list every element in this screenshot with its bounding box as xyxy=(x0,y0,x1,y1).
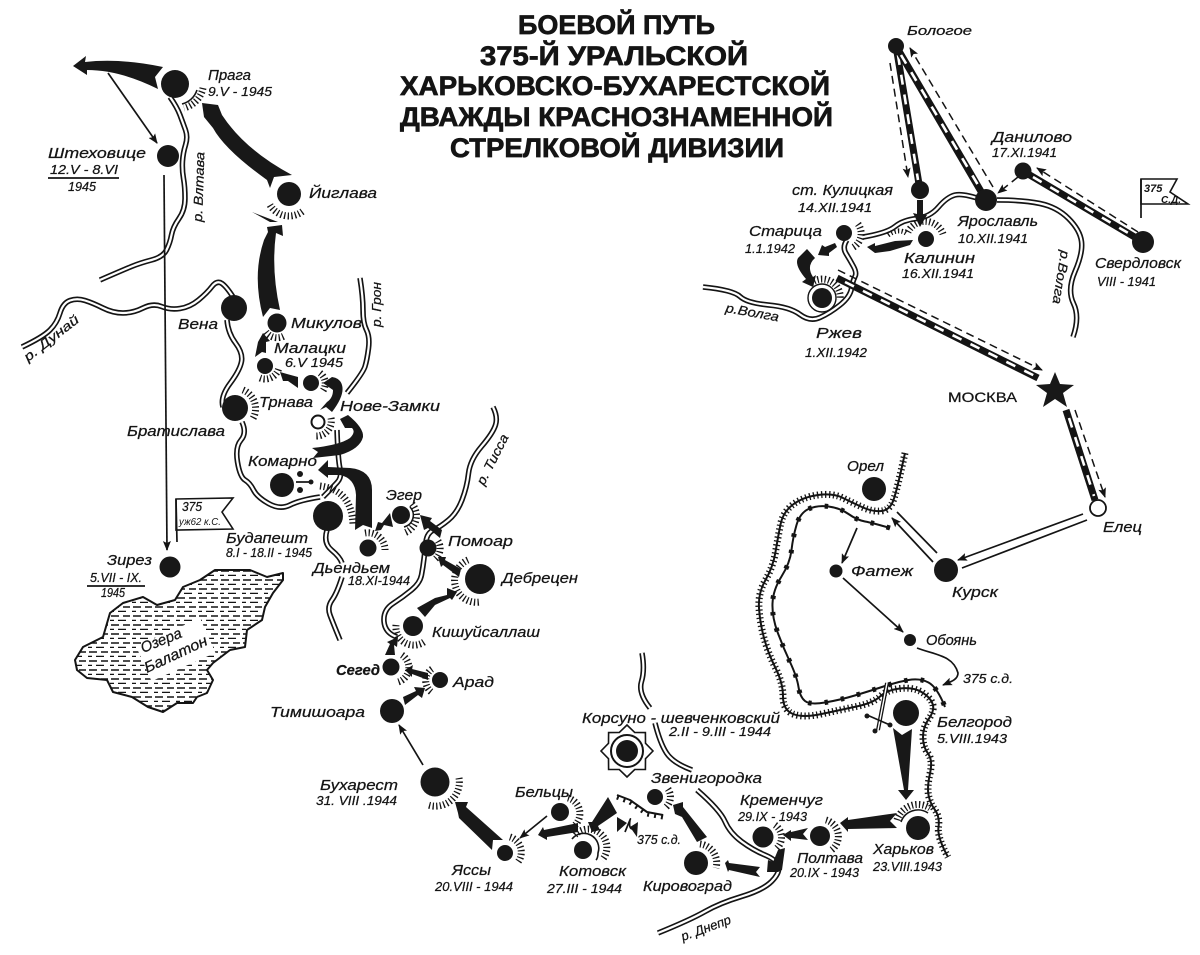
city: Shtekhovitse: 12.V - 8.VI xyxy=(50,162,118,177)
railway routes xyxy=(837,46,1143,500)
front line near Zvenigorodka with 375th division symbol xyxy=(617,795,681,847)
arrow: Pomoar to Eger xyxy=(420,515,442,538)
city: Timisoara xyxy=(270,699,404,723)
city: Sverdlovsk xyxy=(1095,231,1182,289)
city: Rzhev xyxy=(805,279,868,360)
city: Shtekhovitse: 1945 xyxy=(68,179,97,194)
arrow: Kulitskaya to Kalinin xyxy=(913,200,927,227)
city: Zvenigorodka xyxy=(647,770,762,808)
city: Poltava: 20.IX - 1943 xyxy=(789,865,860,880)
arrow: Kotovsk to Beltsy xyxy=(538,823,578,840)
city: Iasi: Яссы xyxy=(451,862,491,879)
city: Zvenigorodka: Звенигородка xyxy=(651,770,762,787)
city: Debrecen: Дебрецен xyxy=(500,570,578,587)
city: Bucharest: 31. VIII .1944 xyxy=(316,793,397,808)
title xyxy=(400,9,833,163)
river labels: р.Волга xyxy=(1050,248,1073,305)
arrow: Oboyan to Belgorod front xyxy=(917,648,958,685)
city: Malacky: Малацки xyxy=(274,340,347,357)
city: Kremenchug xyxy=(737,792,824,849)
city: Gyongyos xyxy=(311,533,410,588)
city: Eger xyxy=(386,487,422,533)
city: Szeged: Сегед xyxy=(336,662,380,679)
river labels: р.Волга xyxy=(723,300,780,324)
encirclement: Korsun-Shevchenkovsky: 2.II - 9.III - 1944 xyxy=(668,724,771,739)
city: Bratislava and Trnava xyxy=(127,390,313,440)
encirclement: Korsun-Shevchenkovsky: Корсуно - шевченковский xyxy=(582,710,781,727)
city: Shtekhovitse: Штеховице xyxy=(48,145,146,162)
station: Kulitskaya: ст. Кулицкая xyxy=(792,182,893,199)
arrow: Kharkov to Poltava xyxy=(840,813,897,832)
city: Kursk: Курск xyxy=(952,584,999,601)
city: Bologoe xyxy=(888,23,972,54)
city: Vienna: Вена xyxy=(178,316,218,333)
title: 375-Й УРАЛЬСКОЙ xyxy=(480,40,748,71)
city: Budapest: 8.I - 18.II - 1945 xyxy=(226,545,313,560)
arrow: Jihlava to Prague xyxy=(202,103,292,188)
city: Elets xyxy=(1090,500,1142,536)
arrow: Prague to Shtekhovitse xyxy=(108,73,157,143)
city: Shtekhovitse xyxy=(48,145,179,194)
city: Prague: 9.V - 1945 xyxy=(208,84,273,99)
city: Sverdlovsk: VIII - 1941 xyxy=(1097,274,1156,289)
title: ДВАЖДЫ КРАСНОЗНАМЕННОЙ xyxy=(400,101,833,132)
front line: Kursk bulge xyxy=(759,453,948,857)
division label: 375 s.d. near Belgorod: 375 с.д. xyxy=(963,671,1013,686)
arrow: Poltava to Kremenchug xyxy=(783,828,808,841)
river labels: р. Грон xyxy=(369,282,384,328)
city: Pomoar xyxy=(420,533,513,560)
city: Staritsa: 1.1.1942 xyxy=(745,241,796,256)
city: Yaroslavl: Ярославль xyxy=(957,213,1038,230)
city: Budapest xyxy=(226,486,353,560)
city: Pomoar: Помоар xyxy=(448,533,513,550)
city: Kalinin: 16.XII.1941 xyxy=(902,266,974,281)
city: Malacky: 6.V 1945 xyxy=(285,355,344,370)
city: Belgorod with crossed swords: Белгород xyxy=(937,714,1012,731)
city: Bratislava and Trnava: Трнава xyxy=(259,394,313,411)
arrow: Beltsy to Iasi xyxy=(520,816,547,838)
arrow: Nove Zamky curved xyxy=(320,377,343,412)
arrow: Szeged to Kishuysallash xyxy=(385,637,398,655)
river labels: р. Дунай xyxy=(20,312,82,365)
river labels: р. Днепр xyxy=(678,912,733,944)
city: Kalinin: Калинин xyxy=(904,250,975,267)
city: Arad xyxy=(426,669,494,693)
arrow: Shtekhovitse to Zirez xyxy=(164,175,167,550)
arrow: Rzhev curved xyxy=(797,249,816,287)
city: Iasi xyxy=(434,837,521,894)
encirclement: Korsun-Shevchenkovsky xyxy=(582,710,781,777)
title: ХАРЬКОВСКО-БУХАРЕСТСКОЙ xyxy=(400,70,830,101)
city: Kremenchug: 29.IX - 1943 xyxy=(737,809,808,824)
rivers xyxy=(22,97,1082,933)
city: Danilovo: Данилово xyxy=(990,129,1072,146)
arrow: Gyongyos to Komarno xyxy=(318,460,372,530)
city: Malacky xyxy=(257,340,347,379)
city: Bratislava and Trnava: Братислава xyxy=(127,423,225,440)
city: Oboyan xyxy=(904,632,977,649)
city: Bucharest: Бухарест xyxy=(320,777,398,794)
arrow: Mikulov to Jihlava xyxy=(252,212,283,317)
city: Orel: Орел xyxy=(847,458,885,475)
city: Beltsy xyxy=(515,784,580,825)
city: Zirez xyxy=(87,552,180,600)
flag: 375 near Sverdlovsk: С.Д. xyxy=(1161,195,1181,206)
city: Budapest: Будапешт xyxy=(226,530,308,547)
flag: 375 near Zirez xyxy=(176,498,233,542)
city: Mikulov xyxy=(266,314,362,338)
arrow: Staritsa to Rzhev xyxy=(818,243,837,256)
title: СТРЕЛКОВОЙ ДИВИЗИИ xyxy=(450,132,784,163)
flag: 375 near Zirez: уж62 к.С. xyxy=(178,517,221,528)
city: Poltava xyxy=(789,820,863,880)
city: Arad: Арад xyxy=(452,674,494,691)
city: Prague: Прага xyxy=(208,67,251,84)
city: Yaroslavl: 10.XII.1941 xyxy=(958,231,1028,246)
city: Bucharest xyxy=(316,768,459,808)
settlement between Malacky and Trnava xyxy=(303,373,325,392)
station: Kulitskaya: 14.XII.1941 xyxy=(798,200,872,215)
arrow: Elets to Kursk xyxy=(958,514,1087,568)
city: Kirovograd xyxy=(643,844,732,895)
flag: 375 near Sverdlovsk xyxy=(1141,179,1188,218)
arrow: Dnieper to Kirovograd xyxy=(725,860,760,877)
city: Nove Zamky xyxy=(312,398,441,436)
city: Kalinin xyxy=(888,221,975,281)
city: Belgorod with crossed swords: 5.VIII.1943 xyxy=(937,731,1008,746)
city: Kishuysallash: Кишуйсаллаш xyxy=(432,624,541,641)
arrow: Arad to Szeged xyxy=(405,665,428,680)
city: Fatezh xyxy=(830,563,914,580)
city: Iasi: 20.VIII - 1944 xyxy=(434,879,513,894)
city: Timisoara: Тимишоара xyxy=(270,704,365,721)
city: Gyongyos: Дьендьем xyxy=(311,560,390,577)
arrow: 375 to Kotovsk xyxy=(588,797,617,832)
city: Szeged xyxy=(336,655,409,682)
city: Rzhev: 1.XII.1942 xyxy=(805,345,868,360)
arrow: Eger to Gyongyos xyxy=(375,513,393,531)
city: Zirez: 5.VII - IX. xyxy=(90,570,142,585)
city: Danilovo xyxy=(990,129,1072,180)
arrow: Trnava to Malacky xyxy=(280,372,298,388)
city: Kotovsk: Котовск xyxy=(559,863,627,880)
lake Balaton: Балатон xyxy=(142,632,210,677)
river labels: р. Влтава xyxy=(190,152,207,223)
city: Yaroslavl xyxy=(957,189,1038,246)
city: Moscow with star: МОСКВА xyxy=(948,389,1018,405)
city: Kremenchug: Кременчуг xyxy=(740,792,824,809)
arrow: Belgorod to Kharkov xyxy=(893,728,914,800)
arrow: Kremenchug to Dnieper xyxy=(767,848,785,872)
arrow: Fatezh to Oboyan xyxy=(843,578,903,632)
city: Eger: Эгер xyxy=(386,487,422,504)
city: Sverdlovsk: Свердловск xyxy=(1095,255,1182,272)
arrow: Malacky to Mikulov xyxy=(255,333,270,357)
city: Zirez: 1945 xyxy=(101,585,126,600)
arrow: Bucharest to Timisoara xyxy=(399,725,423,765)
arrow: Timisoara to Arad xyxy=(403,687,425,705)
city: Prague xyxy=(161,67,273,108)
flag: 375 near Zirez: 375 xyxy=(182,499,203,514)
arrow: Kishuysallash to Debrecen xyxy=(417,588,457,617)
flag: 375 near Sverdlovsk: 375 xyxy=(1144,183,1163,195)
city: Danilovo: 17.XI.1941 xyxy=(992,145,1057,160)
river labels xyxy=(20,152,1073,944)
city: Kharkov: 23.VIII.1943 xyxy=(872,859,943,874)
city: Staritsa: Старица xyxy=(749,223,822,240)
city: Kursk xyxy=(934,558,999,601)
arrow: Kalinin to Staritsa xyxy=(867,240,913,253)
arrow: Iasi to Bucharest xyxy=(455,802,503,850)
city: Jihlava: Йиглава xyxy=(309,184,377,202)
front line near Zvenigorodka with 375th division symbol: 375 с.д. xyxy=(637,832,681,847)
city: Kishuysallash xyxy=(396,616,541,645)
city: Kirovograd: Кировоград xyxy=(643,878,732,895)
city: Beltsy: Бельцы xyxy=(515,784,573,801)
city: Rzhev: Ржев xyxy=(816,325,862,342)
arrow: front to Fatezh xyxy=(842,528,857,563)
city: Moscow with star xyxy=(948,372,1074,407)
city: Bologoe: Бологое xyxy=(907,23,972,38)
city: Zirez: Зирез xyxy=(107,552,152,569)
city: Jihlava xyxy=(270,182,377,216)
city: Kotovsk xyxy=(546,829,627,896)
city: Poltava: Полтава xyxy=(797,850,863,867)
title: БОЕВОЙ ПУТЬ xyxy=(518,9,715,40)
city: Kotovsk: 27.III - 1944 xyxy=(546,881,622,896)
city: Kharkov: Харьков xyxy=(872,841,934,858)
city: Mikulov: Микулов xyxy=(291,315,362,332)
arrow: Prague west xyxy=(73,56,163,89)
city: Fatezh: Фатеж xyxy=(851,563,914,580)
city: Nove Zamky: Нове-Замки xyxy=(340,398,441,415)
city: Elets: Елец xyxy=(1103,519,1142,536)
arrow: Kirovograd to Zvenigorodka xyxy=(673,802,707,842)
city: Debrecen xyxy=(455,560,578,602)
city: Komarno: Комарно xyxy=(248,453,317,470)
city: Vienna xyxy=(178,295,247,333)
arrow: Debrecen to Pomoar xyxy=(438,557,461,577)
river labels: р. Тисса xyxy=(473,432,512,488)
city: Kharkov xyxy=(872,804,943,874)
city: Gyongyos: 18.XI-1944 xyxy=(348,573,410,588)
city: Staritsa xyxy=(745,223,861,256)
city: Komarno xyxy=(248,453,317,497)
city: Orel xyxy=(847,458,886,501)
station: Kulitskaya xyxy=(792,181,929,215)
arrow: Kursk to the front xyxy=(892,512,937,562)
city: Oboyan: Обоянь xyxy=(926,632,977,649)
lake Balaton xyxy=(75,570,283,712)
city: Belgorod with crossed swords xyxy=(864,683,1012,746)
arrow: Komarno to Nove Zamky xyxy=(312,415,363,458)
lake Balaton: Озера xyxy=(138,625,184,657)
